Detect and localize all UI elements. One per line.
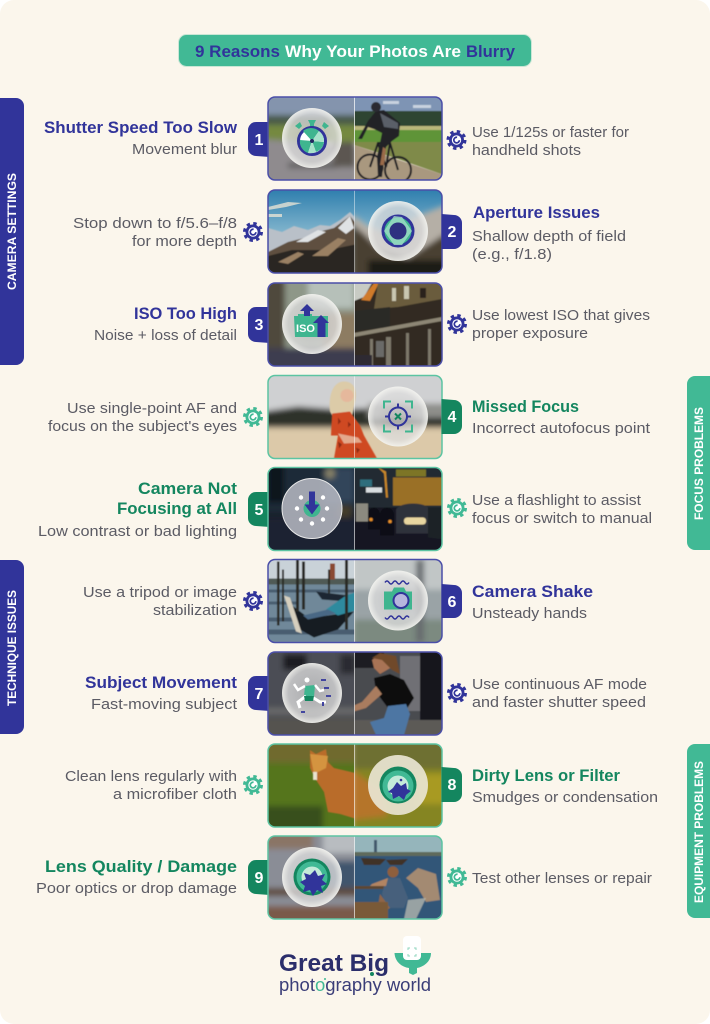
tip 4 <box>48 400 261 435</box>
heading and cause <box>472 397 651 437</box>
tip 4: Use single-point AF and <box>67 400 237 417</box>
number badge 6 <box>442 584 462 618</box>
heading and cause <box>94 304 237 344</box>
photo card 1: cyclist <box>267 96 443 181</box>
icon: logo camera mount <box>394 936 431 975</box>
tip 3: proper exposure <box>472 325 588 342</box>
category tab: camera settings <box>0 98 24 365</box>
category tab: camera settings: CAMERA SETTINGS <box>5 173 19 290</box>
logo <box>279 936 431 995</box>
icon: smudged lens <box>368 755 428 815</box>
icon: iso arrows <box>282 294 342 354</box>
category tab: technique issues <box>0 560 24 734</box>
number badge 5: 5 <box>255 502 264 519</box>
tip 2: Stop down to f/5.6–f/8 <box>73 215 237 232</box>
heading and cause <box>38 479 237 540</box>
icon: stopwatch <box>282 108 342 168</box>
tip 6: Use a tripod or image <box>83 584 237 601</box>
row 6: camera shake <box>84 558 592 644</box>
row 8: dirty lens <box>66 743 657 828</box>
number badge 5 <box>248 492 270 527</box>
tip 8: a microfiber cloth <box>113 786 237 803</box>
number badge 6: 6 <box>448 594 457 611</box>
number badge 4: 4 <box>448 409 457 426</box>
heading and cause: ISO Too High <box>134 304 237 323</box>
tip 1: Use 1/125s or faster for <box>472 124 629 141</box>
tip 7: Use continuous AF mode <box>472 676 647 693</box>
tip 7: and faster shutter speed <box>472 694 646 711</box>
heading and cause: Camera Not <box>138 479 237 498</box>
title banner: Why Your Photos Are <box>285 42 461 61</box>
number badge 9 <box>248 860 270 895</box>
heading and cause <box>36 857 237 897</box>
tip 3: Use lowest ISO that gives <box>472 307 650 324</box>
number badge 9: 9 <box>255 870 264 887</box>
heading and cause: Fast-moving subject <box>91 696 238 713</box>
heading and cause: Smudges or condensation <box>472 789 658 806</box>
heading and cause: Unsteady hands <box>472 605 587 622</box>
heading and cause <box>472 582 593 622</box>
tip 9: Test other lenses or repair <box>472 870 652 887</box>
number badge 4 <box>442 399 462 434</box>
tip 7 <box>449 676 647 711</box>
heading and cause: (e.g., f/1.8) <box>472 246 552 263</box>
tip 3 <box>449 307 650 342</box>
heading and cause: Aperture Issues <box>473 203 600 222</box>
photo card 5: night street <box>267 466 443 552</box>
photo card 7: woman moving <box>267 651 443 736</box>
photo card 8: cat <box>267 743 443 828</box>
number badge 1: 1 <box>255 132 264 149</box>
number badge 8 <box>442 767 462 802</box>
tip 1: handheld shots <box>472 142 581 159</box>
logo: Great Big <box>279 950 389 977</box>
number badge 7 <box>248 676 270 711</box>
row 2: aperture <box>73 190 626 280</box>
number badge 2 <box>442 214 462 249</box>
heading and cause: Lens Quality / Damage <box>45 857 237 876</box>
row 5: not focusing <box>39 466 651 552</box>
photo card 2: mountains <box>268 190 448 280</box>
number badge 3 <box>248 307 270 343</box>
heading and cause: Incorrect autofocus point <box>472 420 651 437</box>
photo card 9: person by water <box>267 835 443 920</box>
category tab: focus problems: FOCUS PROBLEMS <box>692 407 706 520</box>
icon: cracked lens <box>282 847 342 907</box>
icon: shaking camera <box>368 570 428 630</box>
row 7: subject movement <box>86 651 646 736</box>
heading and cause <box>85 673 238 713</box>
heading and cause: Subject Movement <box>85 673 237 692</box>
heading and cause: Noise + loss of detail <box>94 327 237 344</box>
number badge 8: 8 <box>448 777 457 794</box>
row 9: lens quality <box>37 835 652 920</box>
tip 2: for more depth <box>132 233 237 250</box>
heading and cause: Low contrast or bad lighting <box>38 523 237 540</box>
category tab: equipment problems: EQUIPMENT PROBLEMS <box>692 761 706 903</box>
icon: iso arrows: ISO <box>296 323 315 335</box>
heading and cause <box>472 203 626 263</box>
heading and cause: Dirty Lens or Filter <box>472 766 620 785</box>
number badge 7: 7 <box>255 686 264 703</box>
icon: focus target <box>368 386 428 446</box>
photo card 3: street <box>267 282 443 367</box>
logo: photography world <box>279 975 431 995</box>
tip 8 <box>65 768 261 803</box>
row 1: shutter speed <box>44 96 629 181</box>
heading and cause: Poor optics or drop damage <box>36 880 237 897</box>
number badge 3: 3 <box>255 317 264 334</box>
photo card 4: woman <box>267 374 443 460</box>
tip 6: stabilization <box>153 602 237 619</box>
icon: aperture <box>368 201 428 261</box>
row 3: iso <box>95 282 650 367</box>
icon: running figure <box>282 663 342 723</box>
row 4: missed focus <box>48 374 650 460</box>
number badge 1 <box>248 122 270 157</box>
tip 5: Use a flashlight to assist <box>472 492 642 509</box>
heading and cause: Missed Focus <box>472 397 579 416</box>
heading and cause: Focusing at All <box>117 499 237 518</box>
heading and cause: Camera Shake <box>472 582 593 601</box>
heading and cause: Movement blur <box>132 141 237 158</box>
tip 5 <box>449 492 652 527</box>
tip 2 <box>73 215 261 250</box>
heading and cause: Shutter Speed Too Slow <box>44 118 238 137</box>
title banner: 9 Reasons <box>195 42 280 61</box>
number badge 2: 2 <box>448 224 457 241</box>
title banner: Blurry <box>466 42 516 61</box>
category tab: focus problems <box>687 376 710 550</box>
tip 4: focus on the subject's eyes <box>48 418 237 435</box>
photo card 6: gondola <box>267 558 443 644</box>
tip 8: Clean lens regularly with <box>65 768 237 785</box>
heading and cause <box>44 118 238 158</box>
tip 5: focus or switch to manual <box>472 510 652 527</box>
heading and cause <box>472 766 658 806</box>
title banner <box>178 34 532 66</box>
tip 6 <box>83 584 261 619</box>
tip 1 <box>448 124 629 159</box>
category tab: technique issues: TECHNIQUE ISSUES <box>5 590 19 706</box>
heading and cause: Shallow depth of field <box>472 228 626 245</box>
icon: low light arrow <box>282 478 342 538</box>
category tab: equipment problems <box>687 744 710 918</box>
